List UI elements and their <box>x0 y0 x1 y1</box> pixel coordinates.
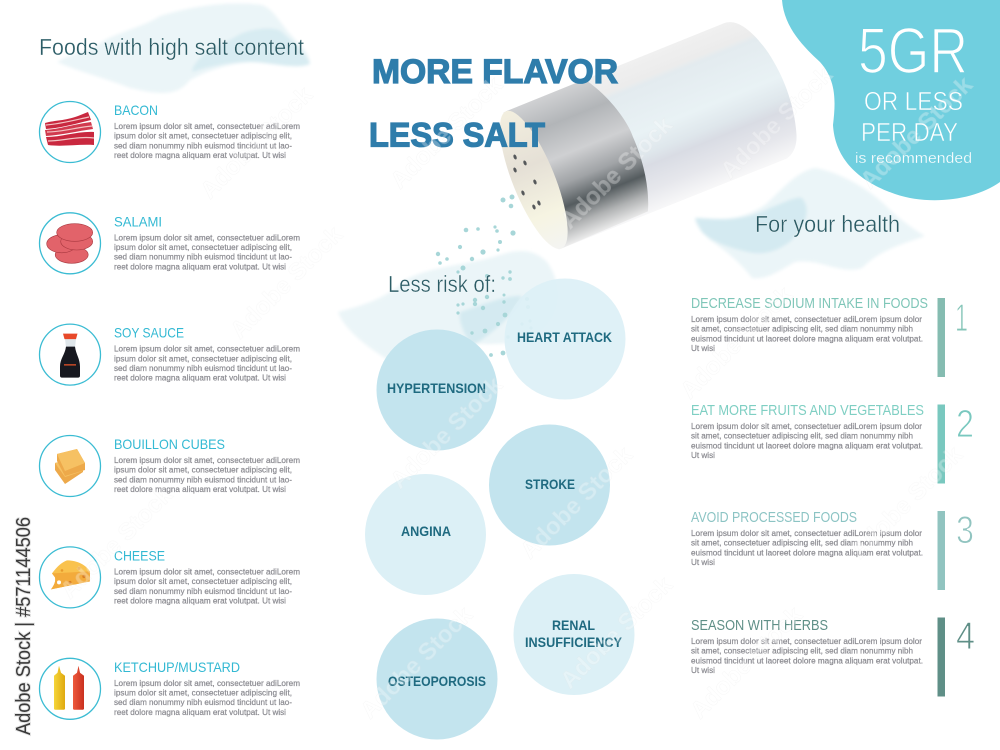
stock watermark pattern: Adobe Stock <box>715 61 838 184</box>
falling salt grains <box>436 194 533 368</box>
tip 3 <box>691 509 974 590</box>
food description: ipsum dolor sit amet, consectetuer adipiscing elit, <box>114 242 292 252</box>
recommendation text: 5GR <box>858 14 968 87</box>
food name: SALAMI <box>114 213 162 229</box>
food description: ipsum dolor sit amet, consectetuer adipiscing elit, <box>114 687 292 697</box>
food name: BOUILLON CUBES <box>114 436 225 452</box>
food description: Lorem ipsum dolor sit amet, consectetuer adiLorem <box>114 455 300 465</box>
recommendation text: OR LESS <box>864 86 963 116</box>
food description <box>114 455 300 494</box>
food description: sed diam nonummy nibh euismod tincidunt ut lao- <box>114 363 292 373</box>
food description: sed diam nonummy nibh euismod tincidunt ut lao- <box>114 586 292 596</box>
food name: CHEESE <box>114 547 165 563</box>
tip 3: AVOID PROCESSED FOODS <box>691 510 857 526</box>
tip 2 number: 2 <box>956 403 974 446</box>
recommendation text <box>855 14 972 167</box>
food description: Lorem ipsum dolor sit amet, consectetuer adiLorem <box>114 344 300 354</box>
risk circle: stroke <box>489 424 610 546</box>
stock watermark pattern: Adobe Stock <box>675 281 798 404</box>
food item: soy sauce <box>40 324 300 385</box>
food description: ipsum dolor sit amet, consectetuer adipiscing elit, <box>114 353 292 363</box>
tip 3 description: euismod tincidunt ut laoreet dolore magna aliquam erat volutpat. <box>691 547 923 557</box>
food description <box>114 344 300 383</box>
shaker body <box>503 11 811 251</box>
title <box>369 53 618 154</box>
icon: mustard and ketchup bottles <box>54 666 84 710</box>
food item: bouillon cubes <box>40 436 300 496</box>
food description: Lorem ipsum dolor sit amet, consectetuer adiLorem <box>114 232 300 242</box>
risk circle: heart attack: HEART ATTACK <box>517 329 612 345</box>
stock watermark pattern: Adobe Stock <box>555 571 678 694</box>
food description: reet dolore magna aliquam erat volutpat. Ut wisi <box>114 373 286 383</box>
salt shaker <box>487 11 811 257</box>
risk circle: angina: ANGINA <box>401 523 451 539</box>
icon: salami <box>47 224 93 263</box>
risk circle: angina <box>365 474 486 595</box>
stock watermark pattern: Adobe Stock <box>385 371 508 494</box>
recommendation text: is recommended <box>855 150 972 167</box>
shaker face <box>487 103 581 256</box>
watercolor blob behind Less risk of <box>338 251 558 361</box>
stock watermark pattern: Adobe Stock <box>385 71 508 194</box>
tip 4 description: Ut wisi <box>691 665 715 675</box>
stock watermark pattern: Adobe Stock <box>515 441 638 564</box>
food description: sed diam nonummy nibh euismod tincidunt ut lao- <box>114 252 292 262</box>
tip 1 number: 1 <box>955 297 968 340</box>
risk circle: hypertension <box>376 330 498 450</box>
tip 3 description: Ut wisi <box>691 557 715 567</box>
shaker holes <box>507 151 546 212</box>
stock watermark pattern: Adobe Stock <box>55 481 178 604</box>
watercolor blob behind For your health <box>695 168 925 278</box>
tip 2 <box>691 403 974 484</box>
stock watermark pattern: Adobe Stock <box>685 601 808 724</box>
title: MORE FLAVOR <box>372 53 618 91</box>
tip 4 number: 4 <box>956 615 975 658</box>
risk circle: osteoporosis <box>376 618 498 740</box>
icon: bacon <box>45 112 94 146</box>
tip 4 description <box>691 636 923 675</box>
stock watermark pattern: Adobe Stock <box>225 221 348 344</box>
tip 4 description: Lorem ipsum dolor sit amet, consectetuer adiLorem ipsum dolor <box>691 636 922 646</box>
food description: sed diam nonummy nibh euismod tincidunt ut lao- <box>114 474 292 484</box>
stock watermark pattern: Adobe Stock <box>355 601 478 724</box>
food name: BACON <box>114 102 158 118</box>
food description: ipsum dolor sit amet, consectetuer adipiscing elit, <box>114 131 292 141</box>
tip 1 description: Lorem ipsum dolor sit amet, consectetuer adiLorem ipsum dolor <box>691 314 922 324</box>
food description <box>114 232 300 271</box>
watercolor blob behind foods heading <box>57 3 310 93</box>
food description <box>114 566 300 605</box>
tip 3 description: Lorem ipsum dolor sit amet, consectetuer adiLorem ipsum dolor <box>691 528 922 538</box>
food description <box>114 678 300 717</box>
food item: salami <box>40 213 300 274</box>
food description: ipsum dolor sit amet, consectetuer adipiscing elit, <box>114 576 292 586</box>
icon: bouillon cubes <box>55 449 85 484</box>
food description: ipsum dolor sit amet, consectetuer adipiscing elit, <box>114 465 292 475</box>
tip 1 bar <box>938 298 945 377</box>
vertical stock credit: Adobe Stock | #571144506 <box>13 517 35 735</box>
tip 3 description: sit amet, consectetuer adipiscing elit, sed diam nonummy nibh <box>691 538 913 548</box>
food item: ketchup and mustard <box>40 658 300 719</box>
food name: KETCHUP/MUSTARD <box>114 659 240 675</box>
tip 3 number: 3 <box>956 509 974 552</box>
stock watermark pattern: Adobe Stock <box>855 71 978 194</box>
food item: cheese <box>40 547 300 608</box>
tip 2 description: sit amet, consectetuer adipiscing elit, sed diam nonummy nibh <box>691 431 913 441</box>
tip 4 description: sit amet, consectetuer adipiscing elit, sed diam nonummy nibh <box>691 646 913 656</box>
tip 1 description: euismod tincidunt ut laoreet dolore magna aliquam erat volutpat. <box>691 333 923 343</box>
tip 2: EAT MORE FRUITS AND VEGETABLES <box>691 403 924 419</box>
food item: bacon <box>40 102 300 162</box>
tip 2 bar <box>938 404 945 484</box>
heading: foods: Foods with high salt content <box>39 34 304 60</box>
stock watermark pattern: Adobe Stock <box>195 81 318 204</box>
stock watermark pattern: Adobe Stock <box>845 441 968 564</box>
food description: Lorem ipsum dolor sit amet, consectetuer adiLorem <box>114 566 300 576</box>
tip 2 description: Lorem ipsum dolor sit amet, consectetuer adiLorem ipsum dolor <box>691 421 922 431</box>
tip 1 <box>691 296 968 377</box>
stock watermark pattern: Adobe Stock <box>555 111 678 234</box>
food name: SOY SAUCE <box>114 325 184 341</box>
food description: reet dolore magna aliquam erat volutpat. Ut wisi <box>114 261 286 271</box>
risk circle: renal insufficiency <box>514 574 634 695</box>
tip 1 description: sit amet, consectetuer adipiscing elit, sed diam nonummy nibh <box>691 324 913 334</box>
risk circle: renal insufficiency: RENAL <box>552 617 595 633</box>
tip 4: SEASON WITH HERBS <box>691 618 828 634</box>
food description: reet dolore magna aliquam erat volutpat. Ut wisi <box>114 707 286 717</box>
tip 2 description: euismod tincidunt ut laoreet dolore magna aliquam erat volutpat. <box>691 440 923 450</box>
tip 3 description <box>691 528 923 567</box>
food description: Lorem ipsum dolor sit amet, consectetuer adiLorem <box>114 121 300 131</box>
heading: for your health: For your health <box>755 211 900 237</box>
risk circle: hypertension: HYPERTENSION <box>387 380 486 396</box>
risk circle: heart attack <box>504 278 626 400</box>
food description: Lorem ipsum dolor sit amet, consectetuer adiLorem <box>114 678 300 688</box>
heading: less risk: Less risk of: <box>388 271 496 297</box>
tip 1: DECREASE SODIUM INTAKE IN FOODS <box>691 296 928 312</box>
title: LESS SALT <box>369 116 545 154</box>
tip 4 <box>691 615 975 696</box>
risk circle: renal insufficiency: INSUFFICIENCY <box>525 634 623 650</box>
food description <box>114 121 300 160</box>
tip 4 description: euismod tincidunt ut laoreet dolore magna aliquam erat volutpat. <box>691 655 923 665</box>
tip 3 bar <box>938 511 945 590</box>
food description: sed diam nonummy nibh euismod tincidunt ut lao- <box>114 697 292 707</box>
recommendation blob <box>782 0 1000 200</box>
tip 1 description <box>691 314 923 353</box>
tip 4 bar <box>938 618 945 696</box>
icon: cheese <box>51 560 90 589</box>
food description: reet dolore magna aliquam erat volutpat. Ut wisi <box>114 150 286 160</box>
food description: reet dolore magna aliquam erat volutpat. Ut wisi <box>114 595 286 605</box>
icon: soy sauce bottle <box>60 334 80 378</box>
tip 2 description: Ut wisi <box>691 450 715 460</box>
tip 2 description <box>691 421 923 460</box>
tip 1 description: Ut wisi <box>691 343 715 353</box>
food description: reet dolore magna aliquam erat volutpat. Ut wisi <box>114 484 286 494</box>
risk circle: osteoporosis: OSTEOPOROSIS <box>388 673 486 689</box>
shaker metal cap <box>506 71 662 248</box>
recommendation text: PER DAY <box>861 117 958 147</box>
risk circle: stroke: STROKE <box>525 476 575 492</box>
food description: sed diam nonummy nibh euismod tincidunt ut lao- <box>114 140 292 150</box>
